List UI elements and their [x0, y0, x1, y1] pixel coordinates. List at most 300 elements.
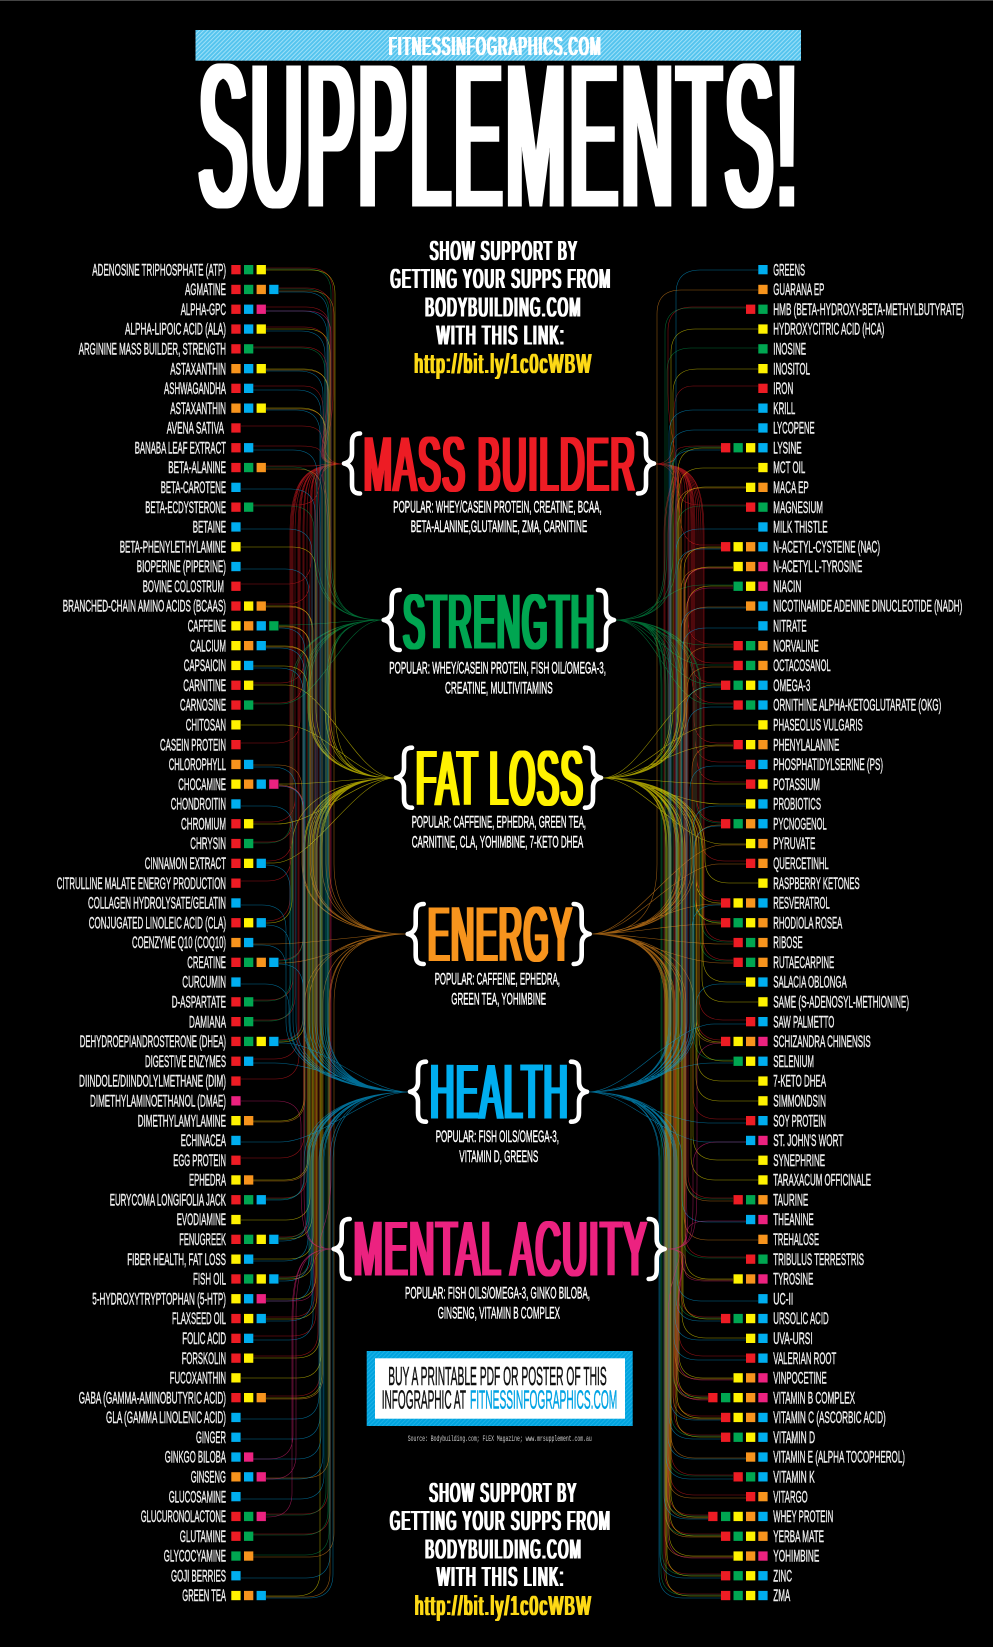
row: eurycoma — [110, 1191, 266, 1209]
brace right — [638, 434, 654, 494]
row: same — [758, 994, 909, 1012]
row: bcaas — [63, 598, 266, 616]
banner: fitnessinfographics.com — [196, 30, 801, 61]
panel: right supplement list: SOY PROTEIN — [773, 1112, 826, 1130]
row: beta-carotene — [161, 479, 241, 497]
row: octacosanol — [734, 657, 831, 675]
row: evodiamine — [177, 1211, 241, 1229]
panel: right supplement list: SYNEPHRINE — [773, 1152, 825, 1170]
callout: buy a printable pdf or poster — [367, 1351, 633, 1426]
row: pycnogenol — [721, 815, 827, 833]
row: alpha-lipoic acid: ALPHA-LIPOIC ACID (ALA) — [125, 321, 226, 339]
lines: right to mass builder — [655, 307, 758, 1594]
row: digestive enzymes: DIGESTIVE ENZYMES — [145, 1053, 226, 1071]
row: chocamine: CHOCAMINE — [178, 776, 226, 794]
panel: right supplement list: PHENYLALANINE — [773, 736, 839, 754]
row: lysine — [721, 439, 802, 457]
row: eurycoma: EURYCOMA LONGIFOLIA JACK — [110, 1191, 226, 1209]
row: digestive enzymes — [145, 1053, 253, 1071]
panel: right supplement list: MCT OIL — [773, 459, 805, 477]
row: chondroitin — [171, 796, 241, 814]
row: potassium — [746, 776, 820, 794]
row: arginine — [79, 340, 253, 358]
row: dhea — [80, 1033, 278, 1051]
row: bovine colostrum — [143, 578, 241, 596]
panel: right supplement list: TARAXACUM OFFICINALE — [773, 1172, 871, 1190]
row: beta-alanine: BETA-ALANINE — [168, 459, 226, 477]
lines: left to mental acuity — [241, 311, 333, 1517]
row: magnesium — [746, 499, 823, 517]
panel: right supplement list: NORVALINE — [773, 637, 819, 655]
popular list — [412, 814, 586, 852]
row: dimethylamylamine: DIMETHYLAMYLAMINE — [138, 1112, 226, 1130]
panel: right supplement list: URSOLIC ACID — [773, 1310, 829, 1328]
row: beta-ecdysterone — [145, 499, 253, 517]
panel: right supplement list: PYCNOGENOL — [773, 815, 827, 833]
row: collagen — [88, 895, 241, 913]
row: uc-ii: UC-II — [773, 1290, 793, 1308]
row: vinpocetine — [734, 1370, 827, 1388]
row: echinacea — [181, 1132, 241, 1150]
category: fat loss — [396, 734, 601, 852]
row: vitamin e — [746, 1449, 905, 1467]
row: carnitine: CARNITINE — [183, 677, 226, 695]
panel: right supplement list: 7-KETO DHEA — [773, 1073, 826, 1091]
text: FITNESSINFOGRAPHICS.COM — [470, 1384, 617, 1414]
row: uva-ursi: UVA-URSI — [773, 1330, 813, 1348]
row: gaba — [79, 1389, 266, 1407]
row: echinacea: ECHINACEA — [181, 1132, 226, 1150]
popular list: CREATINE, MULTIVITAMINS — [445, 679, 553, 697]
row: goji berries: GOJI BERRIES — [171, 1567, 226, 1585]
row: vitamin k — [734, 1468, 815, 1486]
row: alpha-lipoic acid — [125, 321, 266, 339]
row: hca — [758, 321, 884, 339]
popular list — [389, 659, 606, 697]
category: energy — [408, 890, 590, 1008]
row: guarana — [758, 281, 824, 299]
row: fish oil: FISH OIL — [193, 1271, 226, 1289]
row: ginkgo biloba — [165, 1449, 253, 1467]
row: astaxanthin 2: ASTAXANTHIN — [170, 400, 226, 418]
panel: right supplement list: VINPOCETINE — [773, 1370, 827, 1388]
row: phaseolus — [758, 716, 863, 734]
panel: right supplement list: SAW PALMETTO — [773, 1013, 834, 1031]
row: vitamin d: VITAMIN D — [773, 1429, 815, 1447]
row: niacin — [734, 578, 801, 596]
panel: right supplement list: NITRATE — [773, 618, 807, 636]
category: fat loss: POPULAR: CAFFEINE, EPHEDRA, GREEN TEA, — [412, 814, 586, 832]
row: gla — [106, 1409, 241, 1427]
category: mass builder: POPULAR: WHEY/CASEIN PROTEIN, CREATINE, BCAA, — [393, 498, 602, 516]
row: curcumin: CURCUMIN — [182, 974, 226, 992]
panel: right supplement list: IRON — [773, 380, 793, 398]
lines: left to health — [241, 292, 409, 1598]
row: vitamin k: VITAMIN K — [773, 1469, 815, 1487]
row: greens — [758, 261, 805, 279]
popular list — [405, 1285, 590, 1323]
callout: buy a printable pdf or poster: INFOGRAPHIC AT — [382, 1384, 466, 1414]
text block: show support bottom: SHOW SUPPORT BY — [429, 1477, 578, 1508]
row: bcaas: BRANCHED-CHAIN AMINO ACIDS (BCAAS) — [63, 598, 226, 616]
row: theanine — [746, 1211, 814, 1229]
popular list: BETA-ALANINE,GLUTAMINE, ZMA, CARNITINE — [411, 518, 587, 536]
panel: right supplement list — [708, 261, 964, 1605]
text block: show support bottom — [390, 1477, 611, 1621]
popular list — [435, 970, 560, 1008]
row: chlorophyll: CHLOROPHYLL — [169, 756, 226, 774]
panel: right supplement list: LYCOPENE — [773, 420, 815, 438]
panel: right supplement list: MILK THISTLE — [773, 519, 828, 537]
row: st john's wort — [746, 1132, 843, 1150]
row: dmae: DIMETHYLAMINOETHANOL (DMAE) — [90, 1093, 226, 1111]
brace left — [384, 590, 400, 650]
category: mass builder — [344, 420, 654, 536]
row: dimethylamylamine — [138, 1112, 253, 1130]
text: GETTING YOUR SUPPS FROM — [390, 263, 612, 294]
row: coenzyme q10: COENZYME Q10 (COQ10) — [132, 934, 226, 952]
row: inosine — [758, 340, 806, 358]
row: rhodiola rosea — [721, 914, 842, 932]
row: yohimbine: YOHIMBINE — [773, 1548, 819, 1566]
row: avena sativa — [167, 420, 241, 438]
brace right — [598, 590, 614, 650]
panel: right supplement list: GUARANA EP — [773, 281, 824, 299]
panel: right supplement list: VITAMIN B COMPLEX — [773, 1389, 855, 1407]
row: evodiamine: EVODIAMINE — [177, 1211, 226, 1229]
row: ashwagandha: ASHWAGANDHA — [164, 380, 226, 398]
popular list — [436, 1128, 559, 1166]
row: forskolin: FORSKOLIN — [182, 1350, 226, 1368]
text: GETTING YOUR SUPPS FROM — [390, 1505, 611, 1536]
row: n-acetyl l-tyrosine — [734, 558, 862, 576]
panel: right supplement list: PHOSPHATIDYLSERINE (PS) — [773, 756, 883, 774]
row: casein protein — [160, 736, 241, 754]
row: chondroitin: CHONDROITIN — [171, 796, 226, 814]
row: valerian root — [746, 1350, 836, 1368]
panel: right supplement list: RHODIOLA ROSEA — [773, 914, 842, 932]
text block: show support top: BODYBUILDING.COM — [425, 292, 582, 322]
category: strength: POPULAR: WHEY/CASEIN PROTEIN, FISH OIL/OMEGA-3, — [389, 659, 606, 677]
lines: right to health — [588, 270, 758, 1598]
popular list: GREEN TEA, YOHIMBINE — [451, 990, 546, 1008]
row: curcumin — [182, 974, 241, 992]
panel: right supplement list: SELENIUM — [773, 1053, 814, 1071]
row: resveratrol — [721, 895, 830, 913]
row: chromium: CHROMIUM — [181, 815, 226, 833]
panel: right supplement list: GREENS — [773, 261, 805, 279]
row: dim — [79, 1073, 241, 1091]
brace right — [649, 1219, 665, 1279]
row: adenosine triphosphate — [92, 261, 266, 279]
panel: right supplement list: SALACIA OBLONGA — [773, 974, 847, 992]
brace right — [571, 1062, 587, 1122]
text block: show support bottom: WITH THIS LINK: — [437, 1561, 565, 1592]
row: phenylalanine — [734, 736, 839, 754]
category: strength — [384, 578, 614, 697]
row: fiber health — [127, 1251, 253, 1269]
row: avena sativa: AVENA SATIVA — [167, 420, 224, 438]
row: vitamin c — [721, 1409, 886, 1427]
row: glucosamine: GLUCOSAMINE — [169, 1488, 226, 1506]
row: chitosan: CHITOSAN — [186, 717, 226, 735]
row: alpha-gpc: ALPHA-GPC — [181, 301, 226, 319]
popular list: VITAMIN D, GREENS — [459, 1148, 538, 1166]
panel: right supplement list: ZMA — [773, 1587, 790, 1605]
brace left — [344, 434, 360, 494]
row: ursolic acid — [721, 1310, 829, 1328]
lines: right to mental acuity — [666, 568, 746, 1558]
row: quercetinhl — [746, 855, 829, 873]
row: chlorophyll — [169, 756, 253, 774]
panel: right supplement list: QUERCETINHL — [773, 855, 829, 873]
panel: right supplement list: PHASEOLUS VULGARIS — [773, 717, 863, 735]
row: cinnamon extract: CINNAMON EXTRACT — [145, 855, 226, 873]
row: raspberry ketones — [758, 875, 860, 893]
panel: right supplement list: ZINC — [773, 1567, 792, 1585]
row: chrysin: CHRYSIN — [190, 835, 226, 853]
row: caffeine: CAFFEINE — [188, 618, 226, 636]
panel: right supplement list: MACA EP — [773, 479, 809, 497]
panel: right supplement list: POTASSIUM — [773, 776, 820, 794]
text block: show support top — [390, 235, 612, 379]
row: iron — [758, 380, 793, 398]
row: betaine: BETAINE — [193, 519, 226, 537]
row: arginine: ARGININE MASS BUILDER, STRENGTH — [79, 340, 226, 358]
panel: right supplement list: INOSINE — [773, 340, 806, 358]
panel: right supplement list: RIBOSE — [773, 934, 803, 952]
row: gaba: GABA (GAMMA-AMINOBUTYRIC ACID) — [79, 1389, 226, 1407]
panel: right supplement list: N-ACETYL L-TYROSINE — [773, 558, 862, 576]
row: omega-3 — [721, 677, 810, 695]
lines: left to fat loss — [241, 270, 395, 1596]
row: egg protein — [173, 1152, 241, 1170]
row: vitamin d — [721, 1429, 815, 1447]
text: FAT LOSS — [416, 734, 584, 822]
row: niacin: NIACIN — [773, 578, 801, 596]
panel: right supplement list: PROBIOTICS — [773, 796, 821, 814]
row: rutaecarpine — [734, 954, 834, 972]
brace right — [574, 904, 590, 964]
popular list: GINSENG, VITAMIN B COMPLEX — [438, 1305, 560, 1323]
row: goji berries — [171, 1567, 241, 1585]
row: vitamin b complex — [708, 1389, 855, 1407]
panel: right supplement list: INOSITOL — [773, 360, 810, 378]
row: fenugreek: FENUGREEK — [179, 1231, 226, 1249]
row: milk thistle — [758, 519, 828, 537]
row: adenosine triphosphate: ADENOSINE TRIPHOSPHATE (ATP) — [92, 261, 226, 279]
text block: show support top: WITH THIS LINK: — [437, 320, 565, 350]
panel: right supplement list: OCTACOSANOL — [773, 657, 831, 675]
row: selenium — [734, 1053, 814, 1071]
panel: right supplement list: VITARGO — [773, 1488, 808, 1506]
category: health — [410, 1048, 587, 1166]
row: okg — [734, 697, 941, 715]
panel: right supplement list: WHEY PROTEIN — [773, 1508, 833, 1526]
text: HEALTH — [430, 1048, 569, 1136]
panel: right supplement list: SIMMONDSIN — [773, 1093, 826, 1111]
row: tyrosine — [734, 1271, 813, 1289]
row: citrulline malate: CITRULLINE MALATE ENERGY PRODUCTION — [57, 875, 226, 893]
row: synephrine — [758, 1152, 825, 1170]
row: zma — [721, 1587, 790, 1605]
row: beta-phenylethylamine — [120, 538, 241, 556]
lines: left to mass builder — [241, 268, 343, 1534]
row: calcium: CALCIUM — [190, 637, 226, 655]
row: d-aspartate: D-ASPARTATE — [172, 994, 226, 1012]
row: folic acid: FOLIC ACID — [182, 1330, 226, 1348]
category: mental acuity — [334, 1205, 665, 1323]
row: ephedra: EPHEDRA — [189, 1172, 226, 1190]
panel: right supplement list: TAURINE — [773, 1191, 808, 1209]
lines: right to fat loss — [602, 329, 758, 1596]
row: beta-phenylethylamine: BETA-PHENYLETHYLAMINE — [120, 538, 226, 556]
row: taurine — [734, 1191, 808, 1209]
row: whey protein — [708, 1508, 833, 1526]
row: maca — [746, 479, 809, 497]
row: krill — [758, 400, 795, 418]
row: ginkgo biloba: GINKGO BILOBA — [165, 1449, 226, 1467]
lines: left to energy — [253, 291, 407, 1597]
panel: right supplement list: TREHALOSE — [773, 1231, 819, 1249]
panel: right supplement list: VALERIAN ROOT — [773, 1350, 836, 1368]
category: mental acuity: POPULAR: FISH OILS/OMEGA-3, GINKO BILOBA, — [405, 1285, 590, 1303]
row: beta-ecdysterone: BETA-ECDYSTERONE — [145, 499, 226, 517]
row: bovine colostrum: BOVINE COLOSTRUM — [143, 578, 224, 596]
panel: right supplement list: MAGNESIUM — [773, 499, 823, 517]
row: bioperine: BIOPERINE (PIPERINE) — [137, 558, 226, 576]
row: lycopene — [758, 420, 815, 438]
row: mct oil — [758, 459, 805, 477]
row: uc-ii — [758, 1290, 793, 1308]
category: energy: POPULAR: CAFFEINE, EPHEDRA, — [435, 970, 560, 988]
source note: Source: Bodybuilding.com; FLEX Magazine; www.mrsupplement.com.au — [408, 1434, 592, 1444]
panel: right supplement list: KRILL — [773, 400, 795, 418]
row: fucoxanthin — [170, 1370, 241, 1388]
row: norvaline — [734, 637, 819, 655]
row: chitosan — [186, 716, 241, 734]
lines: left to strength — [253, 269, 383, 1555]
row: 7-keto dhea — [758, 1073, 826, 1091]
panel: right supplement list: RASPBERRY KETONES — [773, 875, 860, 893]
row: fiber health: FIBER HEALTH, FAT LOSS — [127, 1251, 226, 1269]
row: coenzyme q10 — [132, 934, 253, 952]
row: tribulus — [746, 1251, 864, 1269]
brace left — [410, 1062, 426, 1122]
row: nac — [721, 538, 880, 556]
brace left — [396, 748, 412, 808]
row: nitrate — [758, 618, 807, 636]
row: flaxseed oil: FLAXSEED OIL — [172, 1310, 226, 1328]
panel: right supplement list: LYSINE — [773, 439, 802, 457]
row: yohimbine — [734, 1548, 819, 1566]
row: ginseng: GINSENG — [191, 1469, 226, 1487]
lines: right to strength — [615, 308, 758, 1595]
row: inositol — [758, 360, 810, 378]
row: phosphatidylserine — [746, 756, 883, 774]
row: collagen: COLLAGEN HYDROLYSATE/GELATIN — [88, 895, 226, 913]
chart: connector lines from supplements to categories — [241, 268, 758, 1598]
row: ribose — [734, 934, 803, 952]
row: yerba mate — [721, 1528, 824, 1546]
row: bioperine — [137, 558, 241, 576]
row: dim: DIINDOLE/DIINDOLYLMETHANE (DIM) — [79, 1073, 226, 1091]
row: glucuronolactone — [141, 1508, 266, 1526]
panel: right supplement list: YERBA MATE — [773, 1528, 824, 1546]
row: egg protein: EGG PROTEIN — [173, 1152, 226, 1170]
row: carnosine: CARNOSINE — [180, 697, 226, 715]
row: glucuronolactone: GLUCURONOLACTONE — [141, 1508, 226, 1526]
row: soy protein — [746, 1112, 826, 1130]
row: ginger: GINGER — [196, 1429, 226, 1447]
row: capsaicin: CAPSAICIN — [184, 657, 226, 675]
row: astaxanthin: ASTAXANTHIN — [170, 360, 226, 378]
row: betaine — [193, 519, 241, 537]
row: 5-htp: 5-HYDROXYTRYPTOPHAN (5-HTP) — [92, 1290, 226, 1308]
brace left — [334, 1219, 350, 1279]
banner: fitnessinfographics.com: FITNESSINFOGRAPHICS.COM — [389, 31, 602, 61]
row: green tea: GREEN TEA — [182, 1587, 226, 1605]
row: glucosamine — [169, 1488, 241, 1506]
panel: right supplement list: THEANINE — [773, 1211, 814, 1229]
row: casein protein: CASEIN PROTEIN — [160, 736, 226, 754]
row: 5-htp — [92, 1290, 266, 1308]
row: salacia oblonga — [746, 974, 847, 992]
row: creatine: CREATINE — [187, 954, 226, 972]
panel: right supplement list: N-ACETYL-CYSTEINE (NAC) — [773, 538, 880, 556]
row: simmondsin — [758, 1092, 826, 1110]
row: vitargo — [746, 1488, 808, 1506]
category: health: POPULAR: FISH OILS/OMEGA-3, — [436, 1128, 559, 1146]
row: cla: CONJUGATED LINOLEIC ACID (CLA) — [89, 914, 226, 932]
brace left — [408, 904, 424, 964]
text: MASS BUILDER — [364, 420, 637, 508]
row: ashwagandha — [164, 380, 253, 398]
row: gla: GLA (GAMMA LINOLENIC ACID) — [106, 1409, 226, 1427]
row: banaba leaf extract — [135, 439, 253, 457]
panel: right supplement list: TYROSINE — [773, 1271, 813, 1289]
row: probiotics — [746, 796, 821, 814]
row: pyruvate — [746, 835, 815, 853]
text: BUY A PRINTABLE PDF OR POSTER OF THIS — [388, 1361, 607, 1391]
row: damiana: DAMIANA — [189, 1013, 226, 1031]
text: ENERGY — [428, 890, 573, 978]
row: trehalose — [758, 1231, 819, 1249]
row: schizandra — [721, 1033, 871, 1051]
text block: show support bottom: http://bit.ly/1c0cWBW — [415, 1590, 592, 1621]
panel: right supplement list: RUTAECARPINE — [773, 954, 834, 972]
panel: right supplement list: OMEGA-3 — [773, 677, 810, 695]
brace right — [585, 748, 601, 808]
row: fucoxanthin: FUCOXANTHIN — [170, 1370, 226, 1388]
popular list — [393, 498, 602, 536]
lines: right to energy — [591, 290, 758, 1557]
panel: right supplement list: ST. JOHN'S WORT — [773, 1132, 843, 1150]
row: ginger — [196, 1429, 241, 1447]
row: dmae — [90, 1092, 241, 1110]
row: taraxacum — [758, 1172, 871, 1190]
row: dhea: DEHYDROEPIANDROSTERONE (DHEA) — [80, 1033, 226, 1051]
panel: left supplement list — [57, 261, 279, 1605]
row: citrulline malate — [57, 875, 241, 893]
popular list: CARNITINE, CLA, YOHIMBINE, 7-KETO DHEA — [412, 834, 583, 852]
row: glutamine: GLUTAMINE — [180, 1528, 226, 1546]
panel: right supplement list: SCHIZANDRA CHINENSIS — [773, 1033, 871, 1051]
row: uva-ursi — [746, 1330, 813, 1348]
panel: right supplement list: RESVERATROL — [773, 895, 830, 913]
panel: right supplement list: PYRUVATE — [773, 835, 815, 853]
row: saw palmetto — [746, 1013, 834, 1031]
